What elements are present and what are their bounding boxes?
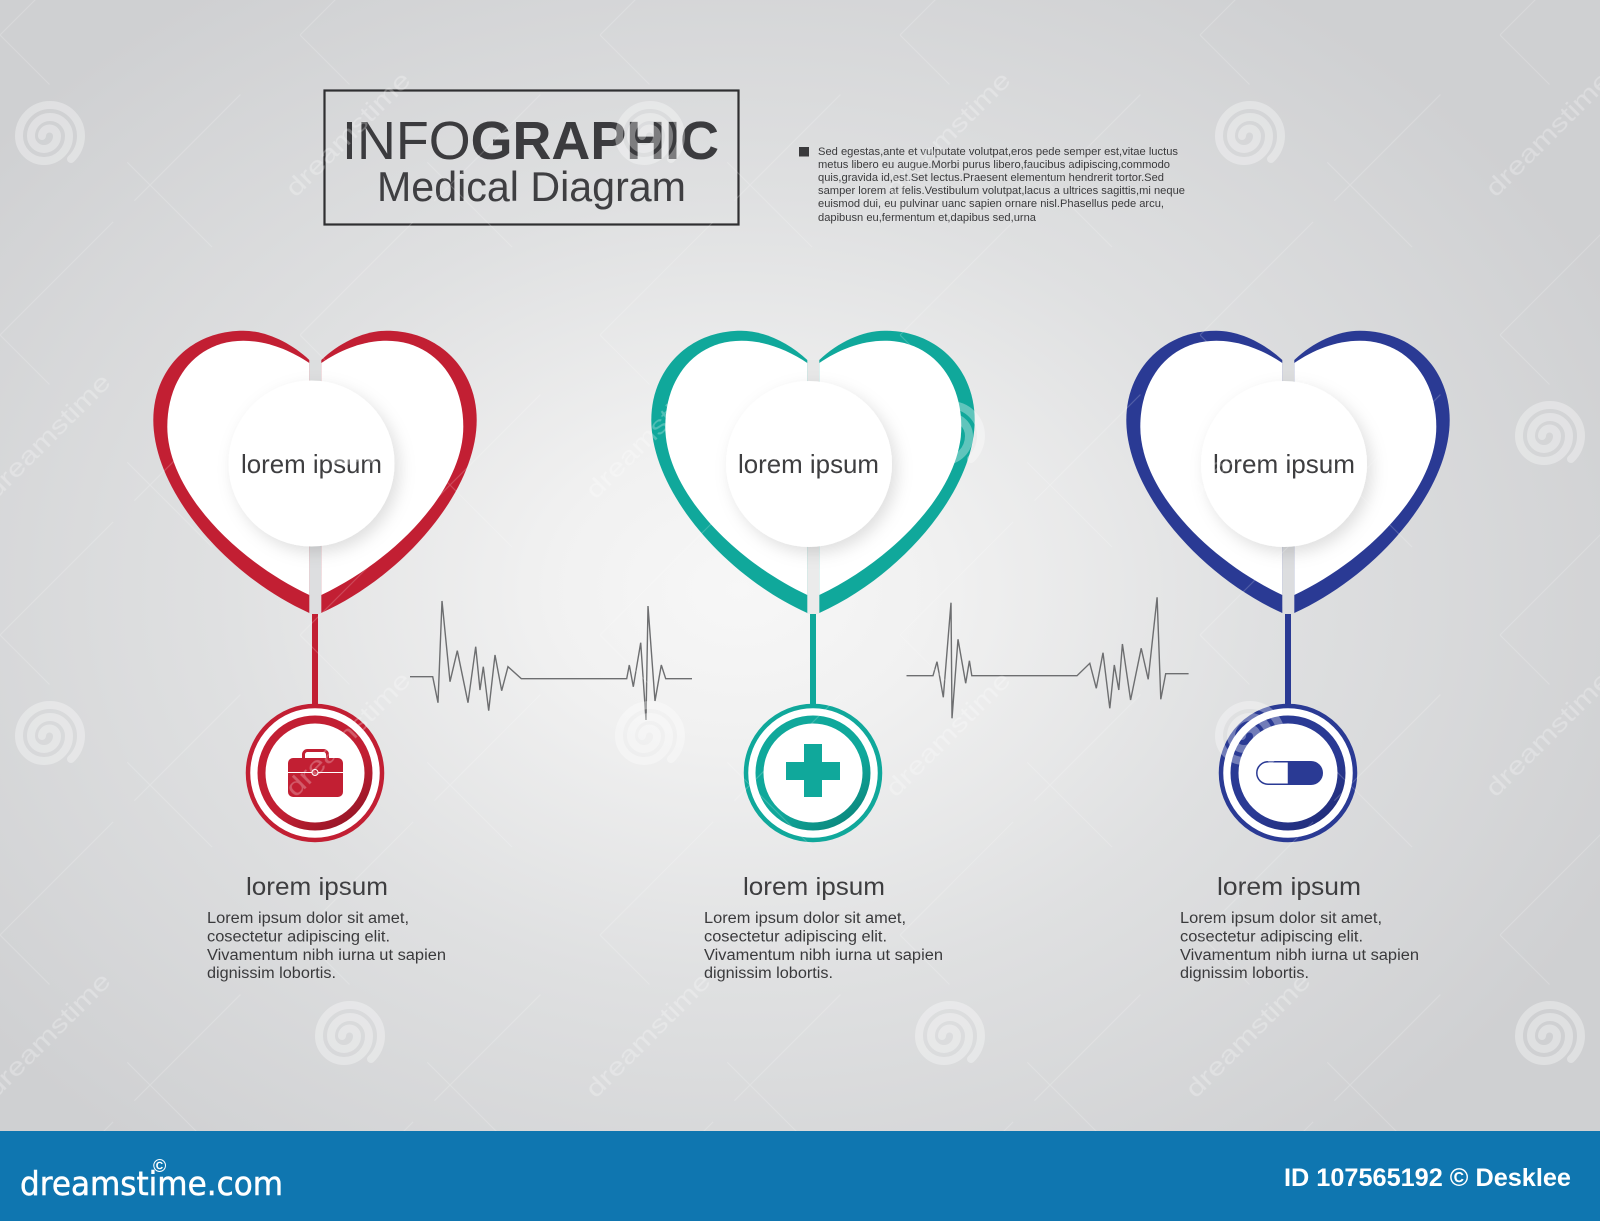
label: heart teal: lorem ipsum [738,449,879,479]
ECG line: right [906,597,1189,718]
stem: red [312,614,318,706]
heading: teal column: lorem ipsum [743,873,885,901]
body text: teal column: dignissim lobortis. [704,965,833,982]
intro paragraph: metus libero eu augue.Morbi purus libero,faucibus adipiscing,commodo [818,159,1170,171]
body text: blue column: cosectetur adipiscing elit. [1180,928,1363,946]
heading: red column: lorem ipsum [246,873,388,901]
footer logo: dreamstime.com [20,1164,283,1203]
body text: blue column [1180,910,1419,982]
watermark pattern: dreamstime [1480,66,1600,203]
body text: red column: dignissim lobortis. [207,965,336,982]
footer credit: ID 107565192 © Desklee [1284,1164,1571,1192]
title box [324,90,738,224]
icon: briefcase [288,750,343,797]
intro paragraph: samper lorem at felis.Vestibulum volutpat,lacus a ultrices sagittis,mi neque [818,185,1185,197]
icon: pill capsule [1257,761,1323,785]
center circle: teal [726,381,892,547]
body text: red column [207,910,446,982]
panel: blue heart column [1126,331,1450,982]
stem: blue [1285,614,1291,706]
intro paragraph [799,146,1185,224]
intro paragraph: Sed egestas,ante et vulputate volutpat,eros pede semper est,vitae luctus [818,146,1178,158]
body text: teal column: cosectetur adipiscing elit. [704,928,887,946]
body text: red column: Lorem ipsum dolor sit amet, [207,910,409,927]
panel: teal heart column [651,331,975,982]
watermark pattern: dreamstime [280,66,417,203]
watermark pattern: dreamstime [280,666,417,803]
icon ring: blue [1221,706,1355,840]
watermark pattern: dreamstime [880,666,1017,803]
body text: teal column [704,910,943,982]
watermark pattern: dreamstime [1480,666,1600,803]
body text: blue column: dignissim lobortis. [1180,965,1309,982]
title: INFOGRAPHIC: INFOGRAPHIC [342,111,719,171]
icon ring: teal [746,706,880,840]
body text: red column: cosectetur adipiscing elit. [207,928,390,946]
footer copyright symbol: © [153,1156,166,1176]
watermark pattern: dreamstime [580,368,717,505]
watermark pattern: dreamstime [580,967,717,1104]
ECG line: left [410,601,692,720]
body text: blue column: Vivamentum nibh iurna ut sapien [1180,947,1419,964]
watermark pattern: dreamstime [1180,368,1317,505]
panel: red heart column [153,331,477,982]
label: heart blue: lorem ipsum [1213,449,1355,479]
watermark pattern: dreamstime [1180,967,1317,1104]
watermark pattern: dreamstime [880,66,1017,203]
blue heart [1126,331,1450,614]
intro paragraph: quis,gravida id,est.Set lectus.Praesent elementum hendrerit tortor.Sed [818,172,1164,184]
heading: blue column: lorem ipsum [1217,873,1361,901]
red heart [153,331,477,614]
body text: teal column: Lorem ipsum dolor sit amet, [704,910,906,927]
label: heart red: lorem ipsum [241,449,382,479]
intro paragraph: dapibusn eu,fermentum et,dapibus sed,urna [818,212,1036,224]
stem: teal [810,614,816,706]
body text: blue column: Lorem ipsum dolor sit amet, [1180,910,1382,927]
teal heart [651,331,975,614]
icon ring: red [248,706,382,840]
icon: medical cross [786,744,840,797]
center circle: blue [1201,381,1367,547]
intro paragraph: euismod dui, eu pulvinar uanc sapien ornare nisl.Phasellus pede arcu, [818,198,1164,210]
subtitle: Medical Diagram: Medical Diagram [377,163,686,210]
body text: teal column: Vivamentum nibh iurna ut sapien [704,947,943,964]
body text: red column: Vivamentum nibh iurna ut sapien [207,947,446,964]
center circle: red [228,380,394,546]
footer band [0,1131,1600,1221]
